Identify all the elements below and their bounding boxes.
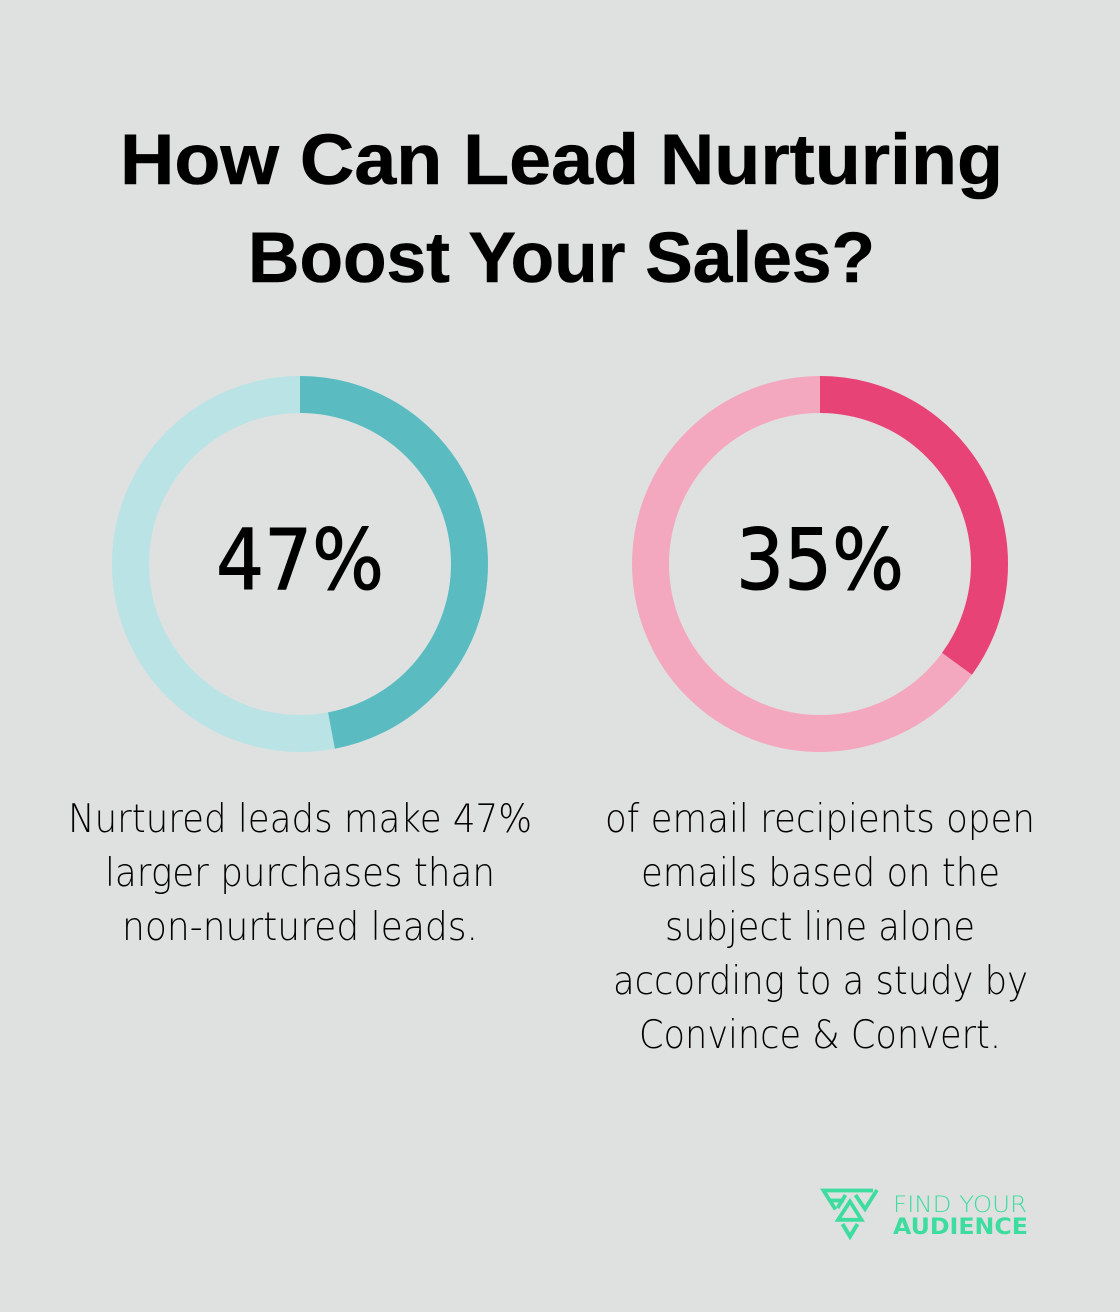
description: email recipients: of email recipients open [605, 796, 1035, 842]
description: email recipients: emails based on the [641, 850, 1000, 896]
value: 35%: 35% [736, 511, 904, 609]
donut chart: 35% [650, 394, 990, 734]
description: email recipients: Convince & Convert. [639, 1012, 1001, 1058]
description: email recipients: subject line alone [665, 904, 975, 950]
panel: 47% stat [68, 394, 532, 950]
description: nurtured leads: larger purchases than [105, 850, 495, 896]
description: email recipients: according to a study by [613, 958, 1028, 1004]
panel: 35% stat [605, 394, 1035, 1058]
description: nurtured leads [68, 796, 532, 950]
wordmark: AUDIENCE [893, 1215, 1028, 1240]
description: nurtured leads: non-nurtured leads. [122, 904, 478, 950]
wordmark [893, 1193, 1028, 1240]
description: email recipients [605, 796, 1035, 1058]
logo: Find Your Audience [824, 1190, 1028, 1240]
description: nurtured leads: Nurtured leads make 47% [68, 796, 532, 842]
title: How Can Lead Nurturing [120, 120, 1003, 200]
wordmark: FIND YOUR [893, 1193, 1027, 1218]
title [120, 120, 1003, 298]
title: Boost Your Sales? [248, 218, 875, 298]
icon: logo mark [824, 1190, 877, 1236]
donut chart: 47% [130, 394, 470, 734]
value: 47%: 47% [216, 511, 384, 609]
